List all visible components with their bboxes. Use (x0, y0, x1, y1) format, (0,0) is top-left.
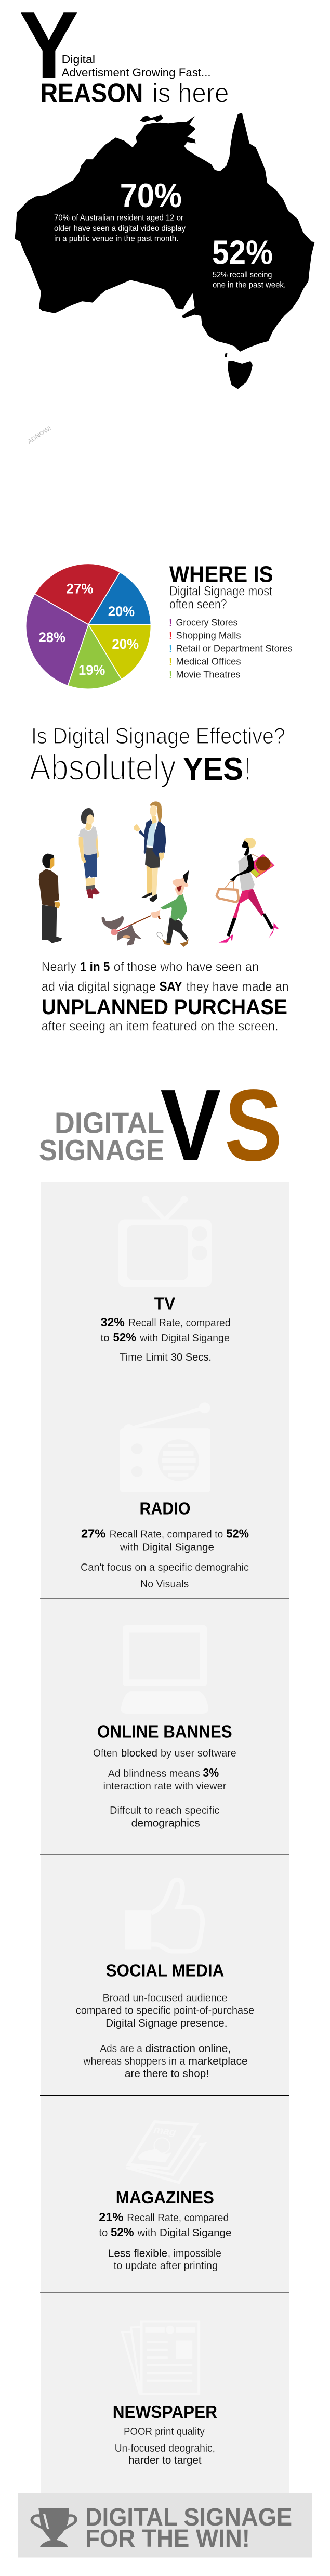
text: online banner facts: Ad blindness means (108, 1768, 200, 1779)
text: TV facts (101, 1315, 231, 1363)
section: TV (101, 1196, 231, 1363)
heading: is digital signage effective, absolutely yes (30, 724, 285, 788)
text: magazine facts: Digital Sigange (160, 2227, 232, 2239)
text: online banner facts: Diffcult to reach specific (110, 1805, 219, 1816)
heading: online bannes: ONLINE BANNES (97, 1722, 232, 1741)
text block: unplanned purchase statistic: UNPLANNED PURCHASE (42, 996, 287, 1019)
text: magazine facts: Less flexible (108, 2248, 167, 2259)
text: radio facts: with (120, 1542, 139, 1554)
heading: magazines: MAGAZINES (116, 2188, 214, 2207)
text: TV facts: with Digital Sigange (139, 1332, 230, 1344)
text: social media facts: Ads are a (100, 2043, 143, 2055)
icon: trophy (32, 2508, 76, 2547)
heading: TV: TV (154, 1293, 175, 1313)
legend: locations list (169, 618, 293, 681)
illustration: people and shopper (39, 801, 279, 947)
stat: 70 percent: 70% of Australian resident aged 12 or (54, 213, 184, 223)
text: magazine facts: Recall Rate, compared (127, 2212, 229, 2224)
heading: newspaper: NEWSPAPER (113, 2402, 217, 2421)
pie chart: where digital signage is seen: 27% (67, 581, 94, 597)
heading: where is digital signage most often seen (169, 562, 273, 612)
text: magazine facts: to update after printing (114, 2260, 218, 2272)
legend: locations list: ! (169, 644, 172, 655)
text: online banner facts: 3% (203, 1766, 219, 1779)
icon: television (118, 1196, 212, 1287)
legend: locations list: ! (169, 618, 172, 629)
section: magazines (99, 2122, 232, 2272)
pie chart: where digital signage is seen: 19% (78, 662, 105, 678)
title: Y digital advertisment growing fast, reason is here: REASON (41, 78, 143, 108)
stat: 70 percent (54, 176, 186, 243)
icon: thumbs up (125, 1880, 203, 1951)
text block: unplanned purchase statistic: SAY (160, 979, 182, 994)
text: magazine facts: , impossible (168, 2248, 221, 2259)
text: TV facts: to (101, 1332, 110, 1344)
heading: is digital signage effective, absolutely yes: Absolutely (30, 747, 176, 788)
text: online banner facts: Often (93, 1748, 117, 1759)
banner: digital signage for the win (18, 2493, 312, 2558)
text: TV facts: 30 Secs. (171, 1352, 212, 1363)
text: magazine facts (99, 2210, 232, 2272)
stat: 52 percent: 52% recall seeing (213, 271, 272, 279)
text: social media facts: whereas shoppers in a (83, 2056, 186, 2067)
legend: locations list: Medical Offices (176, 657, 241, 667)
stat: 52 percent: one in the past week. (213, 281, 286, 289)
text: social media facts: compared to specific point-of-purchase (76, 2005, 254, 2017)
text: TV facts: Time Limit (120, 1352, 168, 1363)
text block: unplanned purchase statistic: they have made an (186, 979, 289, 994)
title: Y digital advertisment growing fast, reason is here (19, 0, 229, 108)
text: online banner facts: demographics (131, 1818, 200, 1829)
icon: magazine: mag (153, 2124, 177, 2138)
text: social media facts: are there to shop! (125, 2068, 209, 2080)
text: online banner facts: interaction rate with viewer (103, 1780, 227, 1792)
section: social media (76, 1880, 254, 2080)
heading: digital signage VS (39, 1068, 282, 1182)
text block: unplanned purchase statistic: 1 in 5 (80, 960, 110, 975)
heading: is digital signage effective, absolutely yes: YES (183, 751, 243, 787)
legend: locations list: Movie Theatres (176, 670, 240, 680)
heading: digital signage VS: DIGITAL (55, 1107, 164, 1140)
text: social media facts: Broad un-focused audience (103, 1993, 227, 2004)
text block: unplanned purchase statistic: ad via digital signage (42, 979, 156, 994)
heading: social media: SOCIAL MEDIA (106, 1960, 224, 1980)
figure: man in brown jacket (39, 854, 62, 943)
text: newspaper facts: harder to target (128, 2455, 202, 2466)
heading: digital signage VS: SIGNAGE (39, 1134, 164, 1167)
heading: digital signage VS: V (160, 1068, 221, 1182)
title: Y digital advertisment growing fast, reason is here: is here (152, 78, 229, 108)
heading: is digital signage effective, absolutely yes: ! (246, 751, 250, 787)
figure: woman in blue blazer (134, 801, 166, 902)
panel: comparison background (41, 1182, 289, 2495)
heading: where is digital signage most often seen: often seen? (169, 597, 227, 612)
legend: locations list: ! (169, 657, 172, 668)
text: newspaper facts (115, 2426, 215, 2466)
text block: unplanned purchase statistic: Nearly (42, 960, 76, 975)
icon: radio (120, 1402, 210, 1492)
text: magazine facts: 52% (111, 2225, 134, 2239)
legend: locations list: Shopping Malls (176, 631, 241, 641)
stat: 70 percent: 70% (120, 176, 182, 214)
text: radio facts: Can't focus on a specific demograhic (81, 1562, 249, 1573)
heading: where is digital signage most often seen: WHERE IS (169, 562, 273, 587)
stat: 70 percent: older have seen a digital video display (54, 224, 186, 233)
text: social media facts: marketplace (188, 2056, 248, 2067)
figure: fashion shopper with bags (217, 838, 279, 943)
pie chart: where digital signage is seen: 20% (112, 636, 139, 652)
text block: unplanned purchase statistic: of those who have seen an (114, 960, 259, 975)
map: Australia silhouette (15, 113, 314, 389)
pie chart: where digital signage is seen: 20% (108, 604, 135, 619)
figure: woman in grey t-shirt (78, 808, 100, 899)
text: online banner facts (93, 1748, 236, 1829)
legend: locations list: Grocery Stores (176, 618, 238, 628)
icon: computer (121, 1625, 208, 1714)
heading: is digital signage effective, absolutely yes: Is Digital Signage Effective? (31, 724, 285, 749)
text: radio facts: 52% (226, 1527, 249, 1541)
stat: 52 percent: 52% (212, 234, 273, 272)
text: TV facts: Recall Rate, compared (128, 1317, 231, 1329)
text: radio facts: Digital Sigange (142, 1542, 214, 1554)
banner: digital signage for the win: DIGITAL SIGNAGE (85, 2504, 292, 2531)
watermark: ADNOW: ADNOW! (27, 425, 52, 445)
legend: locations list: Retail or Department Stores (176, 644, 293, 654)
text: magazine facts: 21% (99, 2210, 123, 2224)
heading: where is digital signage most often seen: Digital Signage most (169, 584, 272, 599)
heading: digital signage VS: S (225, 1068, 282, 1182)
heading: radio: RADIO (139, 1498, 190, 1518)
text: radio facts (81, 1527, 249, 1590)
icon: magazine (126, 2122, 204, 2183)
text: TV facts: 32% (101, 1315, 125, 1329)
legend: locations list: ! (169, 631, 172, 642)
pie chart: where digital signage is seen: 28% (38, 630, 65, 645)
stat: 52 percent (212, 234, 286, 289)
icon: newspaper (122, 2322, 199, 2395)
text: TV facts: 52% (113, 1330, 136, 1344)
text: social media facts: distraction online, (145, 2043, 231, 2055)
text: radio facts: No Visuals (140, 1579, 189, 1590)
text: magazine facts: to (99, 2227, 108, 2239)
pie chart: where digital signage is seen (26, 563, 151, 689)
figure: man walking dog (102, 870, 189, 947)
section: newspaper (113, 2322, 217, 2466)
text: social media facts (76, 1993, 254, 2080)
text block: unplanned purchase statistic: after seeing an item featured on the screen. (42, 1019, 279, 1033)
banner: digital signage for the win: FOR THE WIN! (85, 2525, 250, 2553)
text: magazine facts: with (137, 2227, 156, 2239)
section: radio (81, 1402, 249, 1590)
title: Y digital advertisment growing fast, reason is here: Digital (62, 53, 95, 66)
text block: unplanned purchase statistic (42, 960, 289, 1033)
legend: locations list: ! (169, 670, 172, 681)
text: online banner facts: blocked (121, 1748, 157, 1759)
text: online banner facts: by user software (161, 1748, 236, 1759)
stat: 70 percent: in a public venue in the past month. (54, 234, 178, 243)
text: radio facts: Recall Rate, compared to (110, 1529, 223, 1541)
section: online banners (93, 1625, 236, 1829)
text: social media facts: Digital Signage presence. (105, 2018, 227, 2029)
text: newspaper facts: Un-focused deograhic, (115, 2443, 215, 2454)
title: Y digital advertisment growing fast, reason is here: Advertisment Growing Fast... (62, 66, 211, 79)
text: newspaper facts: POOR print quality (124, 2426, 205, 2438)
text: radio facts: 27% (81, 1527, 105, 1541)
